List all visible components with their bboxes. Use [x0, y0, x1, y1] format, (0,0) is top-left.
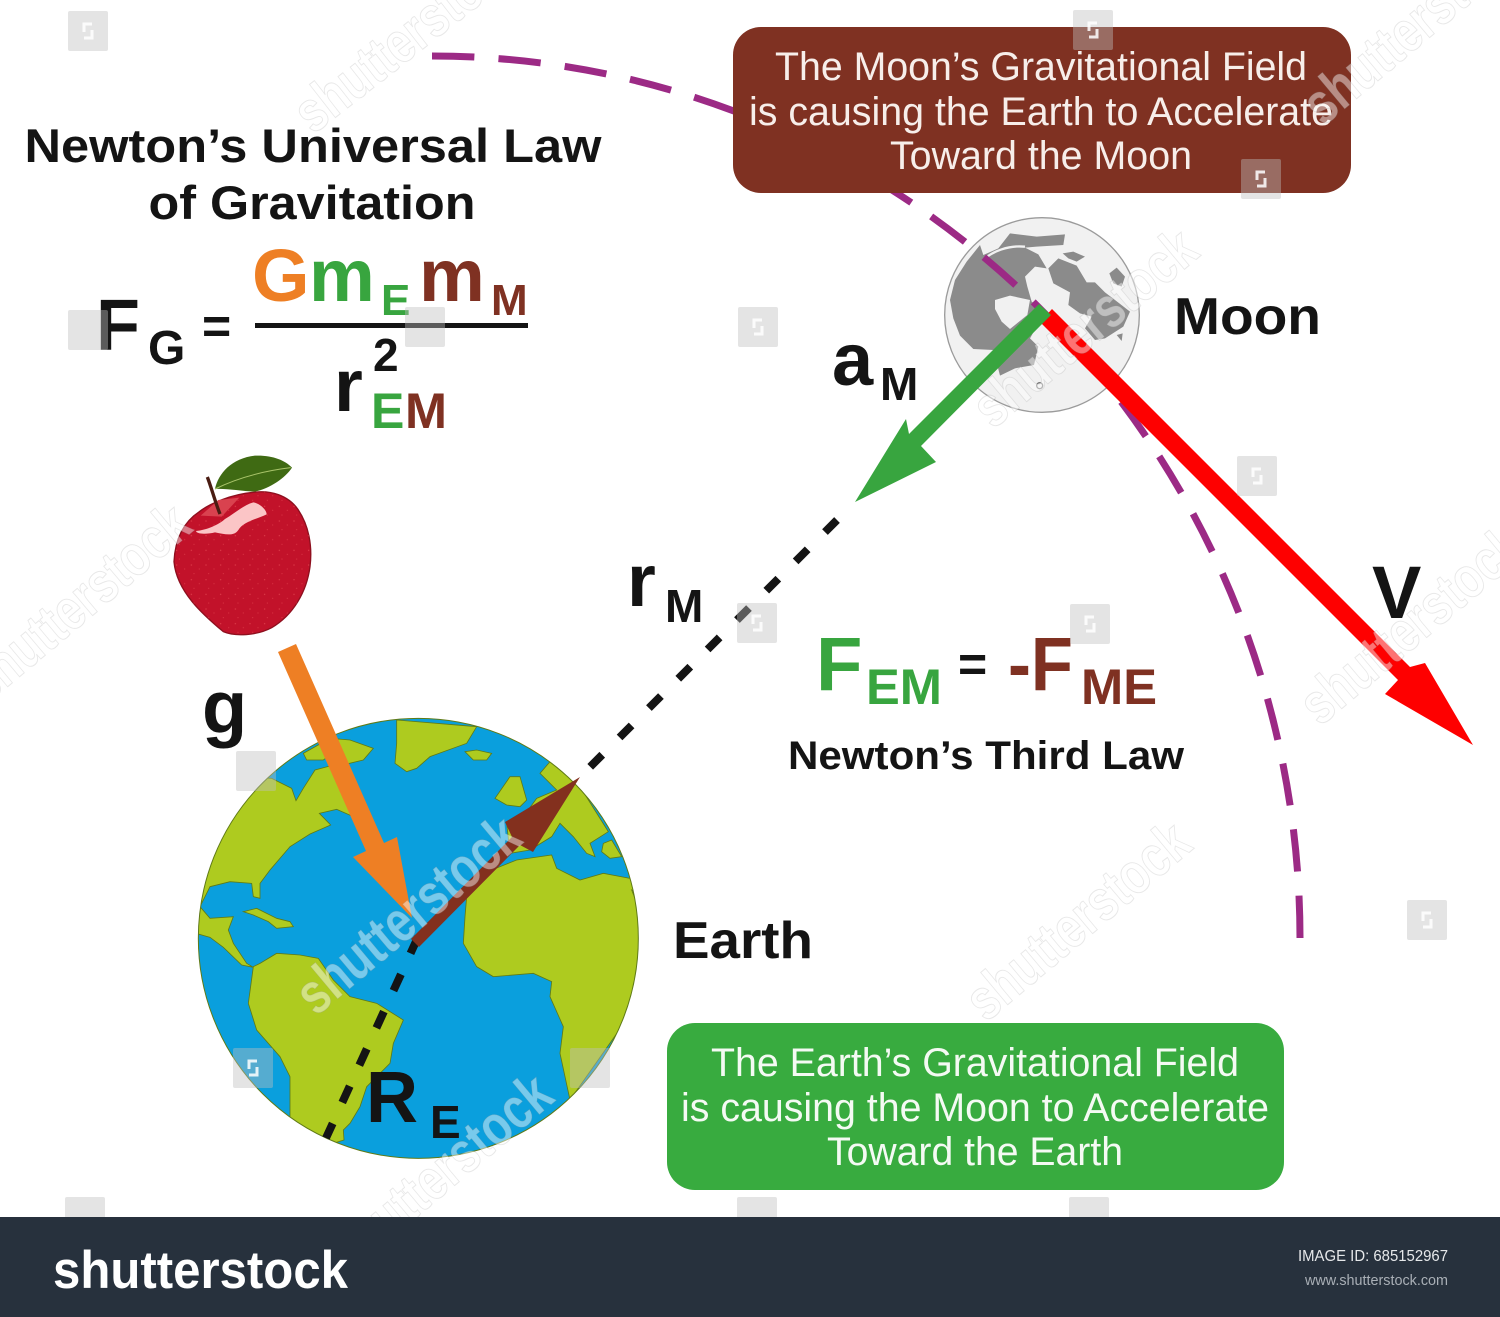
footer image id: IMAGE ID: 685152967 [1298, 1248, 1448, 1265]
formula: Newton's third law [816, 622, 1157, 715]
callout: Earth's gravitational field: The Earth’s Gravitational Field [711, 1041, 1239, 1085]
label: g: g [202, 666, 247, 749]
callout: Earth's gravitational field: Toward the Earth [827, 1130, 1123, 1174]
formula: gravitational force: E [381, 276, 410, 325]
formula: gravitational force: m [419, 234, 485, 317]
formula: gravitational force: r [334, 344, 363, 427]
label: a M [832, 318, 918, 410]
label: R E [366, 1058, 461, 1148]
arrow: Moon acceleration (green) [855, 304, 1051, 502]
formula: Newton's third law: EM [866, 659, 942, 715]
arrow: Moon velocity (red) [1040, 309, 1473, 745]
footer logo text: shutterstock [53, 1241, 348, 1300]
formula: gravitational force: F [96, 286, 140, 366]
label: a M: a [832, 318, 874, 401]
text: shutterstock [960, 215, 1210, 440]
formula: gravitational force [96, 234, 528, 439]
formula: gravitational force: M [405, 383, 447, 439]
orbit path: dashed purple arc [432, 56, 1300, 938]
text: Newton's Third Law: Newton’s Third Law [788, 734, 1185, 778]
title: of Gravitation [148, 176, 476, 229]
formula: Newton's third law: -F [1008, 622, 1073, 707]
formula: gravitational force: E [371, 383, 404, 439]
label: r M: M [665, 580, 703, 632]
formula: gravitational force: m [309, 234, 375, 317]
label: R E: R [366, 1058, 418, 1138]
text: shutterstock [283, 802, 533, 1027]
label: V velocity: V [1372, 551, 1421, 634]
icon: Moon [945, 218, 1139, 412]
formula: gravitational force: = [202, 298, 231, 354]
text: shutterstock [953, 808, 1203, 1033]
callout: Earth's gravitational field: is causing the Moon to Accelerate [681, 1086, 1269, 1130]
arrow: Earth acceleration (brown) [411, 777, 580, 947]
formula: gravitational force: M [491, 276, 528, 325]
title [24, 119, 602, 229]
label: a M: M [880, 358, 918, 410]
title: Newton’s Universal Law [24, 119, 602, 172]
label: r M: r [627, 539, 656, 622]
callout: Moon's gravitational field: Toward the Moon [890, 134, 1192, 178]
label: Earth: Earth [673, 912, 813, 970]
formula: gravitational force: G [252, 234, 310, 317]
callout: Moon's gravitational field: The Moon’s Gravitational Field [775, 45, 1307, 89]
formula: gravitational force: G [148, 322, 185, 375]
icon: apple [174, 456, 311, 635]
footer bar [0, 1217, 1500, 1317]
formula: Newton's third law: = [958, 636, 987, 692]
text: shutterstock [315, 1060, 565, 1285]
dashed line: Earth radius [326, 937, 418, 1138]
dashed line: distance between Earth and Moon [590, 520, 837, 767]
arrow: falling apple gravity (orange) [278, 644, 412, 918]
formula: gravitational force: 2 [373, 329, 399, 381]
footer website: www.shutterstock.com [1304, 1272, 1448, 1289]
label: R E: E [430, 1096, 461, 1148]
callout: Earth's gravitational field [667, 1023, 1284, 1190]
callout: Moon's gravitational field [733, 27, 1351, 193]
label: Moon: Moon [1174, 288, 1321, 346]
formula: Newton's third law: ME [1081, 659, 1157, 715]
callout: Moon's gravitational field: is causing the Earth to Accelerate [749, 90, 1333, 134]
icon: Earth globe [190, 718, 657, 1158]
label: r M [627, 539, 703, 632]
formula: Newton's third law: F [816, 622, 862, 707]
